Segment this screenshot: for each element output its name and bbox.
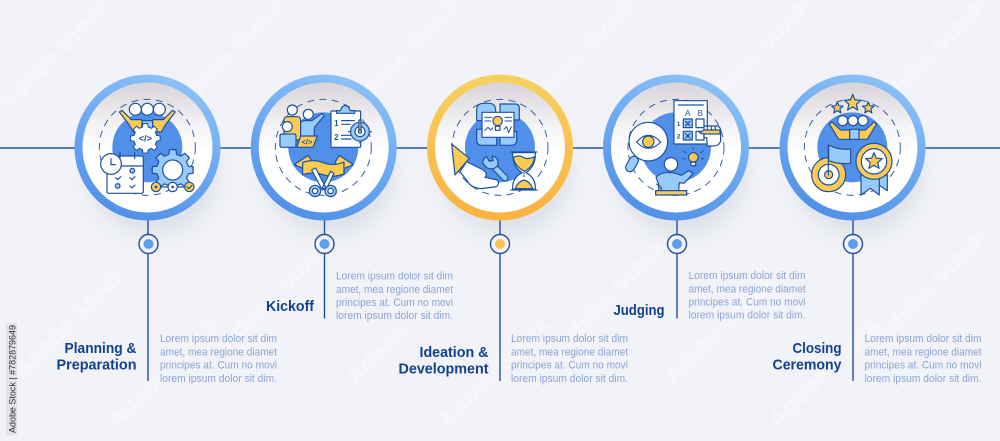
description: Lorem ipsum dolor sit dim xyxy=(160,333,277,345)
ring xyxy=(780,74,926,220)
description: amet, mea regione diamet xyxy=(336,284,453,296)
icon: ribbon cutting and team: </> xyxy=(302,138,312,147)
heading xyxy=(772,340,842,374)
description: Lorem ipsum dolor sit dim xyxy=(688,270,806,282)
description: amet, mea regione diamet xyxy=(160,346,277,358)
ring xyxy=(251,74,397,220)
description: Lorem ipsum dolor sit dim xyxy=(864,333,982,345)
description: principes at. Cum no movi xyxy=(511,360,628,372)
icon: team, gears and calendar xyxy=(99,99,195,195)
watermarks: Adobe Stock xyxy=(548,233,672,356)
description xyxy=(336,270,453,322)
stage 2 kickoff xyxy=(251,74,453,322)
watermarks: Adobe Stock xyxy=(8,261,132,384)
timeline node xyxy=(139,234,158,254)
watermarks: Adobe Stock xyxy=(341,268,465,391)
icon: stars, flag target and medal xyxy=(804,94,900,195)
ring xyxy=(427,74,573,220)
description xyxy=(864,333,982,385)
stage 3 ideation and development xyxy=(398,74,628,385)
horizontal timeline line xyxy=(0,147,1000,149)
heading: Ideation & xyxy=(420,344,489,361)
watermarks: Adobe Stock xyxy=(763,311,887,434)
icon: ribbon cutting and team xyxy=(275,99,371,197)
description: principes at. Cum no movi xyxy=(336,297,453,309)
timeline node xyxy=(490,234,510,254)
icon: ribbon cutting and team: 1 xyxy=(334,119,339,128)
description: Lorem ipsum dolor sit dim xyxy=(336,270,453,282)
icon: scoring sheet, magnifier and presenter xyxy=(628,99,724,195)
ring xyxy=(74,74,220,220)
description: Lorem ipsum dolor sit dim xyxy=(511,333,628,345)
heading: Preparation xyxy=(56,356,136,374)
description: principes at. Cum no movi xyxy=(864,360,982,372)
heading: Kickoff xyxy=(266,298,315,315)
icon: ribbon cutting and team: 2 xyxy=(334,133,339,142)
description: lorem ipsum dolor sit dim. xyxy=(336,310,453,322)
ring xyxy=(603,74,749,220)
heading xyxy=(398,344,489,378)
description: lorem ipsum dolor sit dim. xyxy=(688,310,806,322)
timeline node xyxy=(315,234,334,254)
watermarks: Adobe Stock xyxy=(658,268,782,391)
icon: scoring sheet, magnifier and presenter: B xyxy=(698,109,703,118)
watermarks: Adobe Stock xyxy=(433,311,557,434)
watermarks: Adobe Stock xyxy=(868,225,992,348)
description: lorem ipsum dolor sit dim. xyxy=(864,373,982,385)
stage 4 judging xyxy=(603,74,806,322)
heading: Ceremony xyxy=(772,356,842,374)
description: lorem ipsum dolor sit dim. xyxy=(160,373,277,385)
icon: scoring sheet, magnifier and presenter: 2 xyxy=(677,133,681,140)
icon: scoring sheet, magnifier and presenter: A xyxy=(685,109,691,118)
timeline node xyxy=(844,234,862,254)
icon: scoring sheet, magnifier and presenter: 1 xyxy=(677,121,681,128)
description xyxy=(511,333,628,385)
icon: team, gears and calendar: </> xyxy=(139,134,153,144)
watermarks: Adobe Stock xyxy=(103,311,227,434)
description: amet, mea regione diamet xyxy=(688,284,806,296)
heading: Closing xyxy=(792,340,842,357)
stage 5 closing ceremony xyxy=(772,74,982,385)
description: amet, mea regione diamet xyxy=(864,346,982,358)
heading xyxy=(56,340,137,374)
timeline node xyxy=(668,234,686,254)
icon: idea board, tools and hourglass xyxy=(452,99,548,195)
heading: Development xyxy=(398,360,488,378)
description: principes at. Cum no movi xyxy=(160,360,277,372)
side credit label: Adobe Stock | #782879649 xyxy=(8,325,18,433)
heading: Planning & xyxy=(64,340,137,357)
description: amet, mea regione diamet xyxy=(511,346,628,358)
description xyxy=(160,333,277,385)
watermarks: Adobe Stock xyxy=(213,233,337,356)
description xyxy=(688,270,806,322)
description: principes at. Cum no movi xyxy=(688,296,806,308)
description: lorem ipsum dolor sit dim. xyxy=(511,373,628,385)
stage 1 planning and preparation xyxy=(56,74,277,385)
heading: Judging xyxy=(614,302,664,319)
